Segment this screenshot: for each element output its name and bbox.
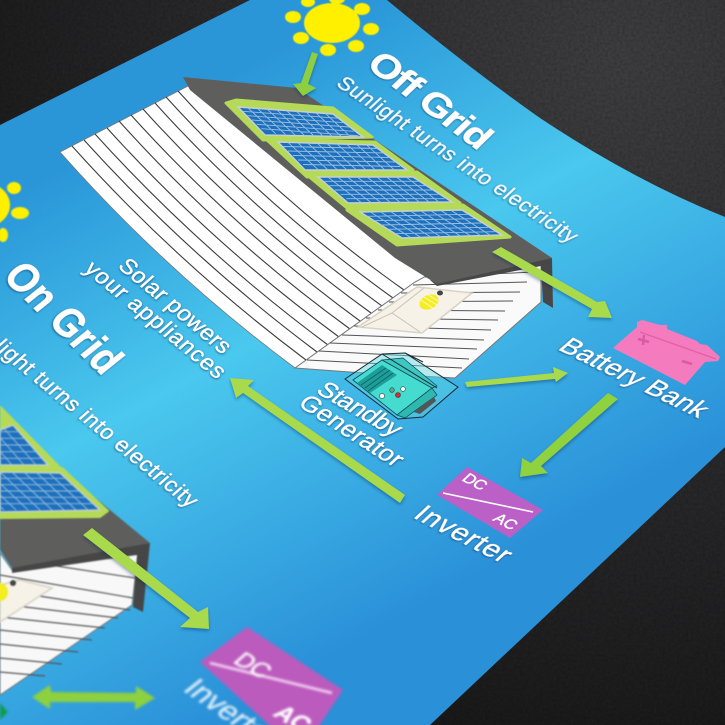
icon: inverter DC AC: DC [458,471,491,494]
panel: off grid house [60,77,553,419]
label: solar powers your appliances: Solar powers [113,253,238,358]
gable wall with siding [0,553,138,695]
text: sunlight off grid: Sunlight turns into electricity [331,73,583,247]
solar panel 4 [347,205,510,245]
arrow: generator to battery [465,367,568,387]
label: standby generator: Generator [293,390,410,472]
lower area blurred by depth of field [0,627,343,725]
solar panel 2 [267,140,413,177]
window with bulb [0,580,52,622]
label: standby generator: Standby [311,377,410,441]
icon: sun on grid [0,182,29,242]
icon: inverter DC AC: AC [489,511,521,533]
icon: standby generator [345,353,458,419]
arrow: double headed [32,685,155,710]
label: inverter: Inverter [408,500,520,568]
arrow: roof to battery [492,247,612,318]
label: battery bank: Battery Bank [553,333,717,422]
icon: inverter DC AC lower [200,627,343,725]
arrow: sun to panels [293,52,318,96]
arrow: battery to inverter [520,393,618,477]
icon: inverter DC AC lower: DC [227,648,278,683]
icon: sun off grid [285,0,379,56]
arrow: roof to inverter [83,528,209,629]
icon: battery [613,320,720,385]
roof siding: white roof with lines [60,85,437,368]
icon: inverter DC AC [437,467,543,538]
solar panel 1 [226,100,372,140]
icon: green fragment [0,703,8,720]
panel: on grid house [0,405,150,695]
gray roof cap and eave [0,470,150,612]
heading: Off Grid: Off Grid [359,44,501,157]
gable wall with siding [295,263,541,378]
label: solar powers your appliances: your appliances [79,256,233,383]
arrow: inverter to appliances [230,378,405,503]
solar panel 3 [307,172,460,208]
gray roof cap and eave [183,77,553,308]
window with light bulb [358,287,472,333]
solar panels [0,405,108,518]
